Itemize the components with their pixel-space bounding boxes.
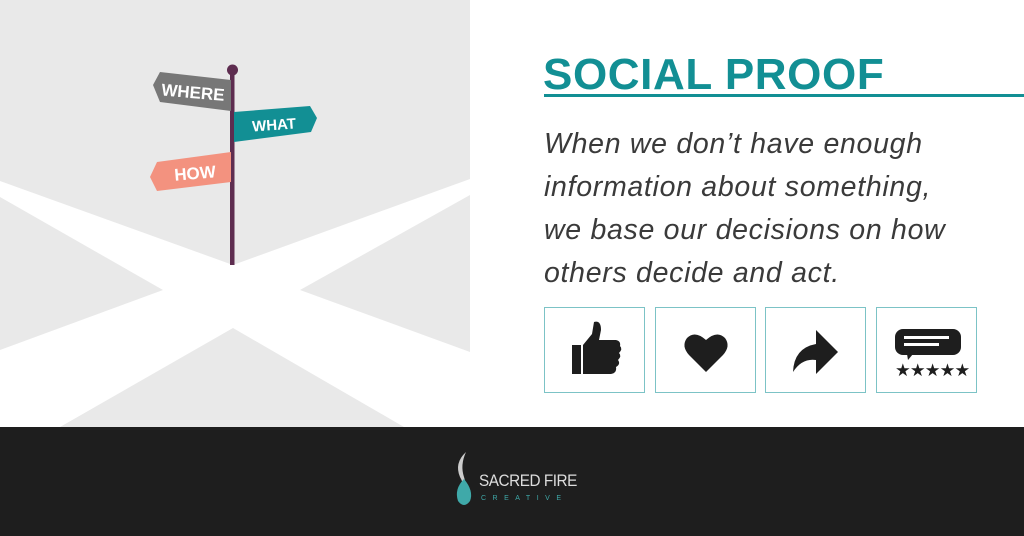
body text — [544, 128, 946, 289]
footer band — [0, 427, 1024, 536]
illustration: crossroads with signpost — [0, 0, 470, 427]
sign: WHERE — [153, 72, 231, 111]
icon box: share arrow — [765, 307, 866, 393]
title underline — [544, 94, 1024, 97]
logo: Sacred Fire Creative: CREATIVE — [481, 495, 568, 502]
body text: others decide and act. — [544, 257, 840, 289]
icon box: heart — [655, 307, 756, 393]
sign: HOW — [150, 152, 231, 191]
logo: Sacred Fire Creative: SACRED FIRE — [479, 471, 577, 490]
body text: we base our decisions on how — [544, 214, 945, 246]
icon box: review with stars — [876, 307, 977, 393]
body text: When we don’t have enough — [544, 128, 923, 160]
sign: WHERE: WHERE — [161, 80, 225, 105]
title: SOCIAL PROOF: SOCIAL PROOF — [543, 50, 884, 99]
sign: HOW: HOW — [174, 162, 218, 185]
signpost pole — [227, 64, 238, 265]
body text: information about something, — [544, 171, 931, 203]
icon box: review with stars: ★★★★★ — [895, 360, 970, 380]
sign: WHAT: WHAT — [252, 115, 297, 135]
sign: WHAT — [234, 106, 317, 142]
logo: Sacred Fire Creative — [456, 452, 577, 505]
icon box: thumbs up — [544, 307, 645, 393]
